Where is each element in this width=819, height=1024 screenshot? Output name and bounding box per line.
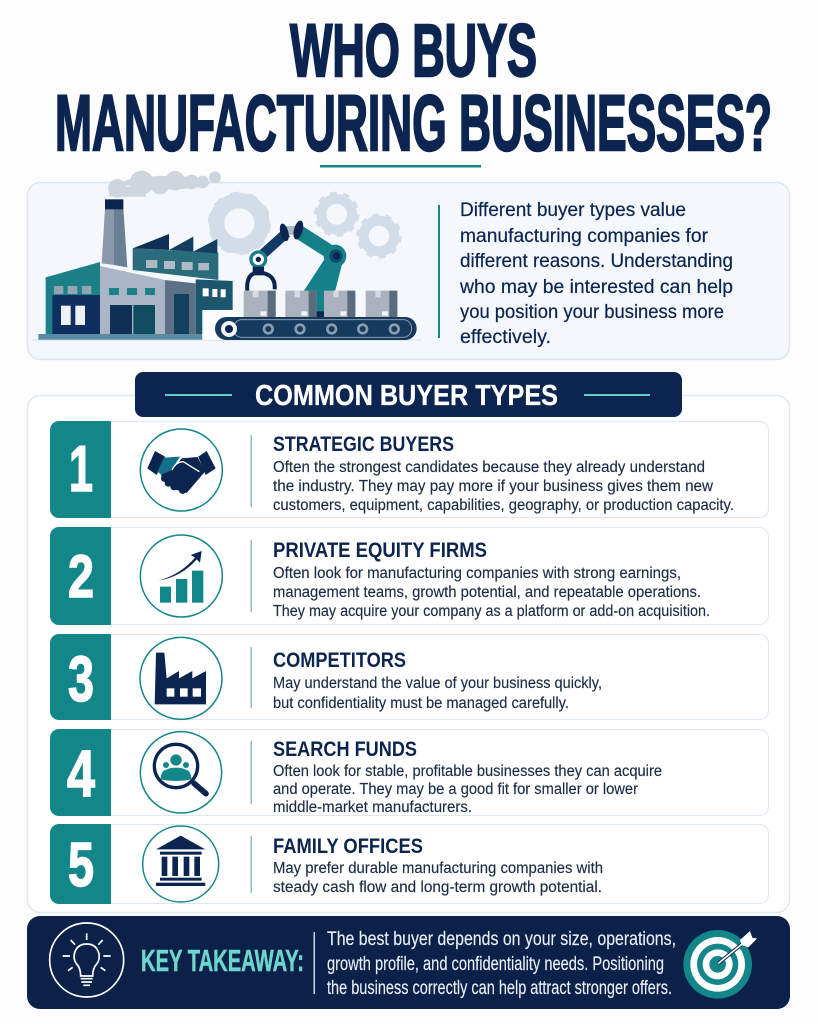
panel: key takeaway	[27, 916, 790, 1009]
heading banner: COMMON BUYER TYPES	[255, 380, 558, 412]
row 2: private equity firms	[50, 527, 768, 625]
row 4: search funds: Often look for stable, profitable businesses they can acquire	[273, 763, 662, 780]
panel: buyer types	[28, 372, 790, 912]
row 3: competitors: 3	[68, 643, 94, 715]
row 5: family offices: FAMILY OFFICES	[273, 835, 423, 858]
row 2: private equity firms: Often look for manufacturing companies with strong earnings,	[273, 565, 681, 582]
icon: factory	[140, 637, 222, 719]
title	[55, 9, 772, 167]
intro text	[459, 200, 733, 348]
row 1: strategic buyers: Often the strongest candidates because they already understand	[273, 459, 705, 476]
row 4: search funds	[50, 729, 768, 816]
panel: intro	[28, 171, 790, 360]
icon: institution building	[143, 826, 219, 902]
row 5: family offices: steady cash flow and long-term growth potential.	[273, 879, 602, 896]
row 4: search funds: and operate. They may be a good fit for smaller or lower	[273, 781, 638, 798]
row 2: private equity firms: They may acquire your company as a platform or add-on acquisition.	[273, 603, 710, 620]
row 3: competitors: COMPETITORS	[273, 649, 406, 672]
row 5: family offices: 5	[68, 831, 94, 900]
row 4: search funds: 4	[67, 736, 95, 810]
icon: magnifier with people	[140, 732, 222, 813]
intro text: different reasons. Understanding	[460, 251, 733, 272]
panel: key takeaway: growth profile, and confidentiality needs. Positioning	[327, 954, 664, 975]
row 5: family offices	[50, 824, 768, 904]
icon: handshake	[140, 429, 222, 511]
row 1: strategic buyers: 1	[69, 432, 93, 505]
title: WHO BUYS	[290, 9, 537, 92]
row 1: strategic buyers: the industry. They may pay more if your business gives them new	[273, 478, 714, 495]
row 3: competitors	[50, 634, 768, 720]
panel: key takeaway: the business correctly can help attract stronger offers.	[327, 978, 672, 999]
illustration: factory and robot arm	[32, 171, 421, 340]
panel: key takeaway: KEY TAKEAWAY:	[141, 943, 304, 978]
row 1: strategic buyers: customers, equipment, capabilities, geography, or production capacity.	[273, 497, 734, 514]
row 1: strategic buyers: STRATEGIC BUYERS	[273, 433, 454, 456]
icon: lightbulb	[50, 923, 124, 997]
icon: target with arrow	[683, 930, 757, 999]
row 4: search funds: SEARCH FUNDS	[273, 738, 417, 761]
intro text: Different buyer types value	[460, 200, 686, 221]
intro text: you position your business more	[460, 302, 724, 323]
row 3: competitors: but confidentiality must be managed carefully.	[273, 695, 569, 712]
row 5: family offices: May prefer durable manufacturing companies with	[273, 860, 603, 877]
row 1: strategic buyers	[50, 421, 768, 518]
intro text: manufacturing companies for	[460, 226, 709, 247]
panel: key takeaway: The best buyer depends on your size, operations,	[327, 929, 676, 950]
intro text: effectively.	[460, 327, 551, 348]
row 2: private equity firms: management teams, growth potential, and repeatable operations.	[273, 584, 701, 601]
row 2: private equity firms: 2	[68, 543, 94, 610]
row 3: competitors: May understand the value of your business quickly,	[273, 675, 602, 692]
icon: growth chart	[140, 535, 222, 617]
row 2: private equity firms: PRIVATE EQUITY FIRMS	[273, 539, 487, 562]
intro text: who may be interested can help	[459, 277, 733, 298]
row 4: search funds: middle-market manufacturers.	[273, 799, 472, 816]
heading banner	[135, 372, 682, 417]
